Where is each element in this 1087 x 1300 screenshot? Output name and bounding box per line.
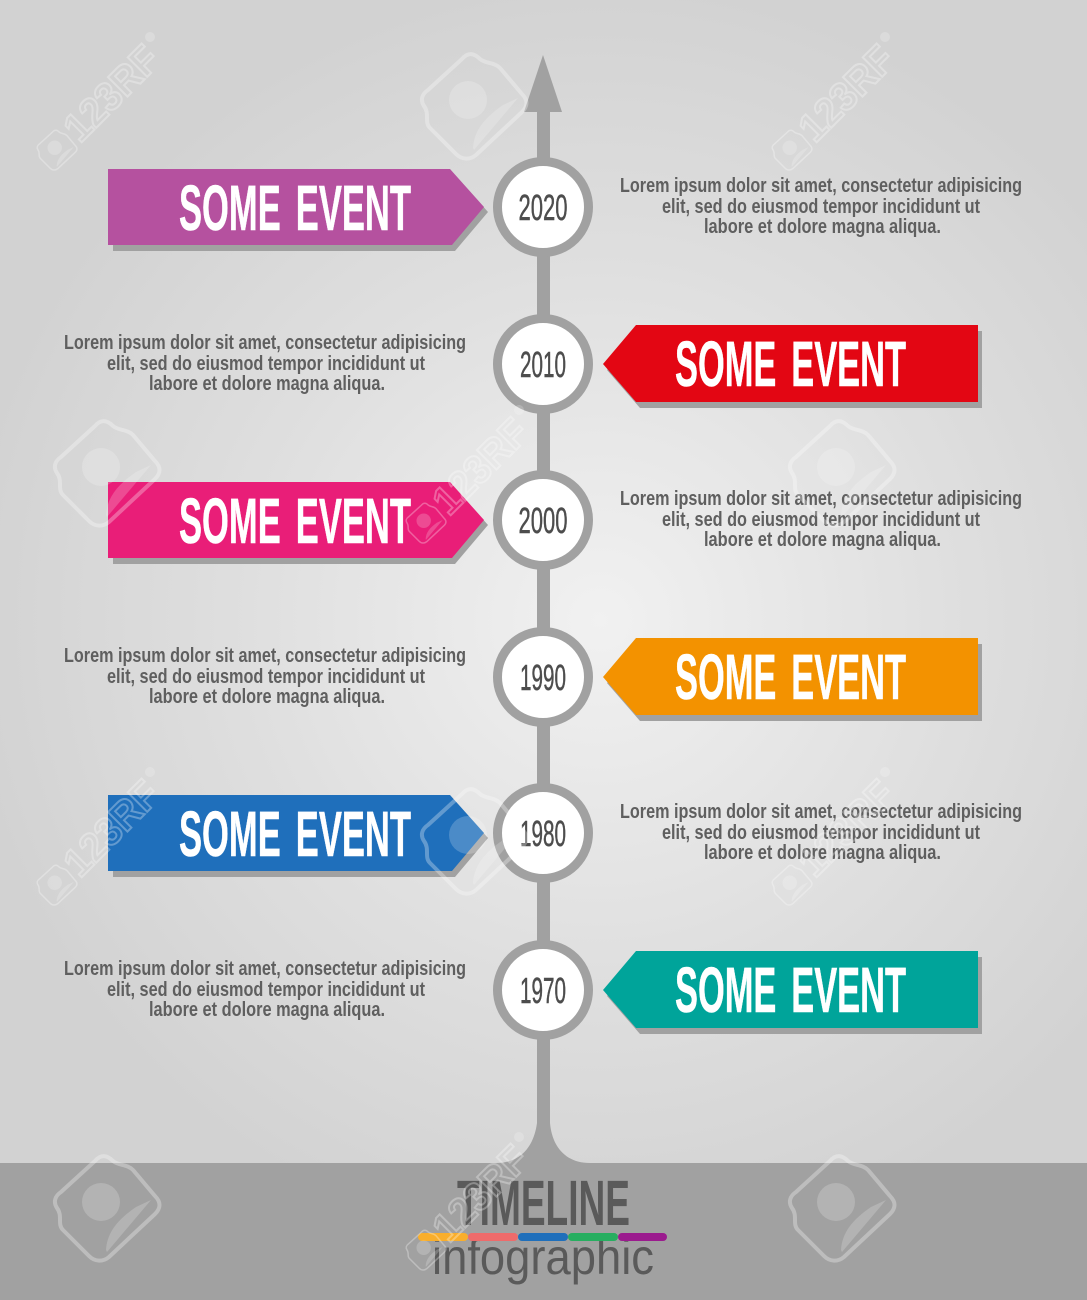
event 2020 row xyxy=(108,162,1022,252)
banner: 2000 event: SOME EVENT xyxy=(179,485,411,557)
banner: 1980 event xyxy=(108,795,488,877)
banner: 1990 event xyxy=(603,638,982,721)
title: TIMELINE: TIMELINE xyxy=(457,1167,630,1239)
year marker 1970 xyxy=(498,944,588,1036)
year marker 1970: 1970 xyxy=(520,970,566,1011)
banner: 2020 event: SOME EVENT xyxy=(179,172,411,244)
watermarks xyxy=(37,32,903,1270)
year marker 2010 xyxy=(498,318,588,410)
event 1970 row xyxy=(64,944,982,1036)
description 1970: labore et dolore magna aliqua. xyxy=(149,999,385,1021)
description 2020 xyxy=(620,175,1022,238)
subtitle: infographic: infographic xyxy=(432,1229,654,1285)
description 2000: elit, sed do eiusmod tempor incididunt ut xyxy=(662,509,980,531)
description 2020: labore et dolore magna aliqua. xyxy=(704,216,941,238)
description 1980: labore et dolore magna aliqua. xyxy=(704,842,941,864)
description 1990 xyxy=(64,645,466,708)
description 2020: elit, sed do eiusmod tempor incididunt ut xyxy=(662,196,980,218)
description 1980 xyxy=(620,801,1022,864)
year marker 1980: 1980 xyxy=(520,813,566,854)
banner: 1980 event: SOME EVENT xyxy=(179,798,411,870)
year marker 2020 xyxy=(498,162,588,252)
ground band xyxy=(0,1163,1087,1300)
year marker 1990 xyxy=(498,632,588,722)
description 2010 xyxy=(64,332,466,395)
colour strip xyxy=(418,1233,667,1241)
description 1970: elit, sed do eiusmod tempor incididunt ut xyxy=(107,979,425,1001)
description 1970 xyxy=(64,958,466,1021)
description 1990: Lorem ipsum dolor sit amet, consectetur adipisicing xyxy=(64,645,466,667)
description 2010: elit, sed do eiusmod tempor incididunt ut xyxy=(107,353,425,375)
year marker 1990: 1990 xyxy=(520,657,566,698)
banner: 1970 event xyxy=(603,951,982,1034)
banner: 2010 event xyxy=(603,325,982,408)
event 1980 row xyxy=(108,788,1022,878)
year marker 2000 xyxy=(498,474,588,566)
description 2010: labore et dolore magna aliqua. xyxy=(149,373,385,395)
event 1990 row xyxy=(64,632,982,722)
event 2000 row xyxy=(108,474,1022,566)
year marker 2010: 2010 xyxy=(520,344,566,385)
year marker 2000: 2000 xyxy=(518,500,568,541)
year marker 1980 xyxy=(498,788,588,878)
description 2000 xyxy=(620,488,1022,551)
banner: 2020 event xyxy=(108,169,488,251)
description 2010: Lorem ipsum dolor sit amet, consectetur adipisicing xyxy=(64,332,466,354)
title block xyxy=(418,1167,667,1285)
description 1990: labore et dolore magna aliqua. xyxy=(149,686,385,708)
description 1970: Lorem ipsum dolor sit amet, consectetur adipisicing xyxy=(64,958,466,980)
arrow: timeline axis xyxy=(496,55,590,1163)
year marker 2020: 2020 xyxy=(518,187,568,228)
event 2010 row xyxy=(64,318,982,410)
description 2000: labore et dolore magna aliqua. xyxy=(704,529,941,551)
description 1990: elit, sed do eiusmod tempor incididunt ut xyxy=(107,666,425,688)
banner: 2000 event xyxy=(108,482,488,564)
description 1980: elit, sed do eiusmod tempor incididunt ut xyxy=(662,822,980,844)
